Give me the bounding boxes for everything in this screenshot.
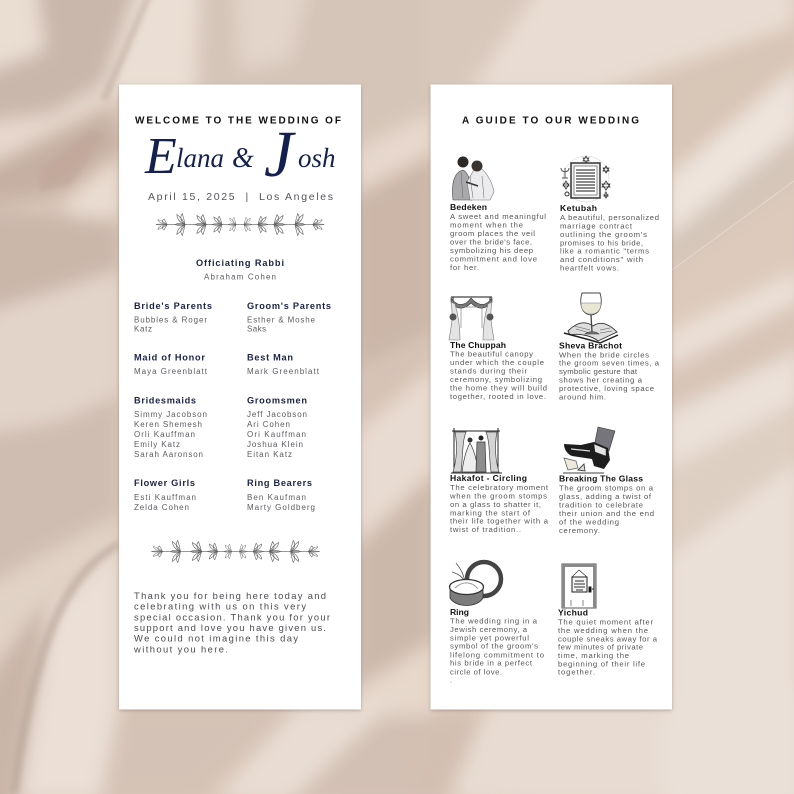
text: breaking the glass: ceremony. <box>559 526 600 535</box>
text: ketubah: promises to his bride, <box>560 238 643 248</box>
text: yichud: together. <box>558 668 595 677</box>
best man: Mark Greenblatt <box>247 367 320 376</box>
text: sheva brachot: the groom seven times, a <box>559 359 660 368</box>
text: the chuppah: the home they will build <box>450 384 547 392</box>
text: breaking the glass: of the wedding <box>559 518 619 526</box>
bridesmaids: Emily Katz <box>134 440 180 449</box>
text: breaking the glass: tradition to celebrate <box>559 500 643 510</box>
thank you message: celebrating with us on this very <box>134 601 306 612</box>
groomsmen: Ori Kauffman <box>247 430 306 439</box>
text: hakafot: Hakafot - Circling <box>450 473 527 483</box>
text: hakafot: The celebratory moment <box>450 483 549 492</box>
panel: wedding program card <box>119 84 361 710</box>
text: sheva brachot: Sheva Brachot <box>559 340 622 350</box>
text: ketubah: heartfelt vows. <box>560 264 619 272</box>
text: ring: simple yet powerful <box>450 633 529 642</box>
text: bedeken: symbolizing his deep <box>450 246 533 255</box>
text: bedeken: for her. <box>450 263 479 272</box>
groom's parents: Groom's Parents <box>247 301 331 311</box>
text: ketubah: like a romantic "terms <box>560 246 649 256</box>
text: ring <box>450 607 544 684</box>
ring bearers: Marty Goldberg <box>247 503 315 512</box>
ring bearers <box>247 478 315 512</box>
text: hakafot: their life together with a <box>450 517 549 526</box>
heading: guide: A GUIDE TO OUR WEDDING <box>462 116 639 126</box>
bridesmaids: Orli Kauffman <box>134 430 195 439</box>
text: sheva brachot: protective, loving space <box>559 384 654 393</box>
ring bearers: Ben Kaufman <box>247 493 306 502</box>
text: the chuppah: stands during their <box>450 366 527 376</box>
text: hakafot: when the groom stomps <box>449 492 547 500</box>
text: the chuppah <box>450 340 547 401</box>
text: ring: circle of love. <box>450 667 502 676</box>
text: ketubah: marriage contract <box>560 222 633 230</box>
text: bedeken: commitment and love <box>450 254 537 264</box>
icon: hakafot couple under canopy <box>451 428 502 473</box>
text: yichud: The quiet moment after <box>558 617 653 626</box>
icon: bedeken couple <box>452 156 494 200</box>
bridesmaids: Keren Shemesh <box>134 420 202 429</box>
icon: yichud door with sign <box>562 564 596 608</box>
text: yichud: time, marking the <box>558 651 629 660</box>
text: the chuppah: The beautiful canopy <box>450 350 533 359</box>
icon: chuppah <box>449 297 494 340</box>
text: ring: lifelong commitment to <box>450 650 544 659</box>
flower girls <box>134 478 196 512</box>
groomsmen: Jeff Jacobson <box>247 410 307 419</box>
bridesmaids <box>134 396 207 459</box>
text: breaking the glass <box>559 474 654 535</box>
officiating rabbi: Officiating Rabbi <box>196 258 284 268</box>
text: the chuppah: ceremony, symbolizing <box>450 375 542 384</box>
text: sheva brachot: When the bride circles <box>559 350 649 359</box>
text: hakafot <box>449 473 549 534</box>
bride's parents: Bubbles & Roger <box>134 316 207 324</box>
groom's parents: Esther & Moshe <box>247 316 316 324</box>
text: the chuppah: under which the couple <box>450 358 544 367</box>
groom's parents: Saks <box>247 324 266 334</box>
text: hakafot: on a glass to shatter it, <box>450 500 541 509</box>
text: sheva brachot: shows her creating a <box>559 376 643 384</box>
text: ring: Jewish ceremony, a <box>450 625 528 634</box>
text: breaking the glass: glass, adding a twist of <box>559 492 652 501</box>
ring bearers: Ring Bearers <box>247 478 312 488</box>
text: breaking the glass: The groom stomps on a <box>559 484 654 493</box>
text: ring: The wedding ring in a <box>450 617 538 626</box>
thank you message: Thank you for being here today and <box>134 590 326 601</box>
text: yichud: the wedding when the <box>558 626 648 635</box>
groomsmen: Groomsmen <box>247 396 307 406</box>
groomsmen: Eitan Katz <box>247 450 292 459</box>
names: Elana & Josh: osh <box>298 143 336 173</box>
icon: wine glass on open book <box>564 293 618 343</box>
icon: laurel branch top <box>156 214 324 236</box>
text: hakafot: twist of tradition.. <box>450 525 521 534</box>
maid of honor: Maya Greenblatt <box>134 367 208 376</box>
best man: Best Man <box>247 352 293 362</box>
maid of honor <box>134 352 208 376</box>
text: ring: . <box>450 676 452 684</box>
text: yichud: Yichud <box>558 608 588 618</box>
text: bedeken: moment when the <box>450 220 523 230</box>
icon: laurel branch bottom <box>152 540 320 562</box>
date and location: April 15, 2025 | Los Angeles <box>148 191 333 203</box>
bridesmaids: Bridesmaids <box>134 396 196 406</box>
icon: wedding rings <box>450 562 501 606</box>
text: yichud: beginning of their life <box>558 659 645 668</box>
text: ketubah: A beautiful, personalized <box>560 213 659 222</box>
text: ketubah: Ketubah <box>560 203 597 213</box>
maid of honor: Maid of Honor <box>134 352 205 362</box>
groomsmen <box>247 396 307 459</box>
text: yichud <box>558 608 658 677</box>
text: the chuppah: The Chuppah <box>450 340 506 350</box>
names: Elana & Josh: & <box>232 143 254 174</box>
groomsmen: Joshua Klein <box>247 440 303 449</box>
text: hakafot: marking the start of <box>450 508 531 517</box>
text: ketubah <box>560 203 659 272</box>
text: yichud: couple sneaks away for a <box>558 634 658 643</box>
thank you message: special occasion. Thank you for your <box>134 611 330 622</box>
names: Elana & Josh: J <box>264 118 296 191</box>
heading: welcome: WELCOME TO THE WEDDING OF <box>135 116 341 126</box>
text: bedeken: A sweet and meaningful <box>450 212 546 221</box>
thank you message: support and love you have given us. <box>134 622 326 633</box>
thank you message: We could not imagine this day <box>134 633 298 644</box>
text: ring: Ring <box>450 607 469 617</box>
names: Elana & Josh: E <box>144 128 177 185</box>
text: ring: his bride in a perfect <box>450 659 533 668</box>
flower girls: Zelda Cohen <box>134 503 189 512</box>
text: breaking the glass: their union and the end <box>559 509 654 518</box>
names: Elana & Josh: lana <box>176 143 224 173</box>
flower girls: Esti Kauffman <box>134 493 196 502</box>
text: sheva brachot: symbolic gesture that <box>559 367 638 376</box>
text: sheva brachot: around him. <box>559 392 606 402</box>
text: yichud: few minutes of private <box>558 643 643 652</box>
text: ketubah: outlining the groom's <box>560 230 647 239</box>
thank you message: without you here. <box>133 643 228 654</box>
icon: ketubah document <box>561 156 610 202</box>
text: bedeken: Bedeken <box>450 202 487 212</box>
best man <box>247 352 320 376</box>
groom's parents <box>247 301 331 334</box>
text: ketubah: and conditions" with <box>560 255 643 264</box>
text: bedeken <box>450 202 546 272</box>
bridesmaids: Simmy Jacobson <box>134 410 207 419</box>
bridesmaids: Sarah Aaronson <box>134 450 203 459</box>
icon: shoe breaking the glass <box>563 427 615 473</box>
groomsmen: Ari Cohen <box>247 420 290 429</box>
text: ring: symbol of the groom's <box>450 642 538 651</box>
text: bedeken: groom places the veil <box>450 229 535 238</box>
officiating rabbi <box>196 258 284 282</box>
flower girls: Flower Girls <box>134 478 195 488</box>
panel: wedding guide card <box>430 84 672 710</box>
officiating rabbi: Abraham Cohen <box>204 272 276 282</box>
bride's parents: Bride's Parents <box>134 301 212 311</box>
text: the chuppah: together, rooted in love. <box>450 392 546 401</box>
text: breaking the glass: Breaking The Glass <box>559 474 643 484</box>
text: sheva brachot <box>559 340 660 402</box>
text: bedeken: over the bride's face, <box>450 238 532 246</box>
bride's parents <box>134 301 212 334</box>
thank you message <box>133 590 330 654</box>
bride's parents: Katz <box>134 324 152 334</box>
